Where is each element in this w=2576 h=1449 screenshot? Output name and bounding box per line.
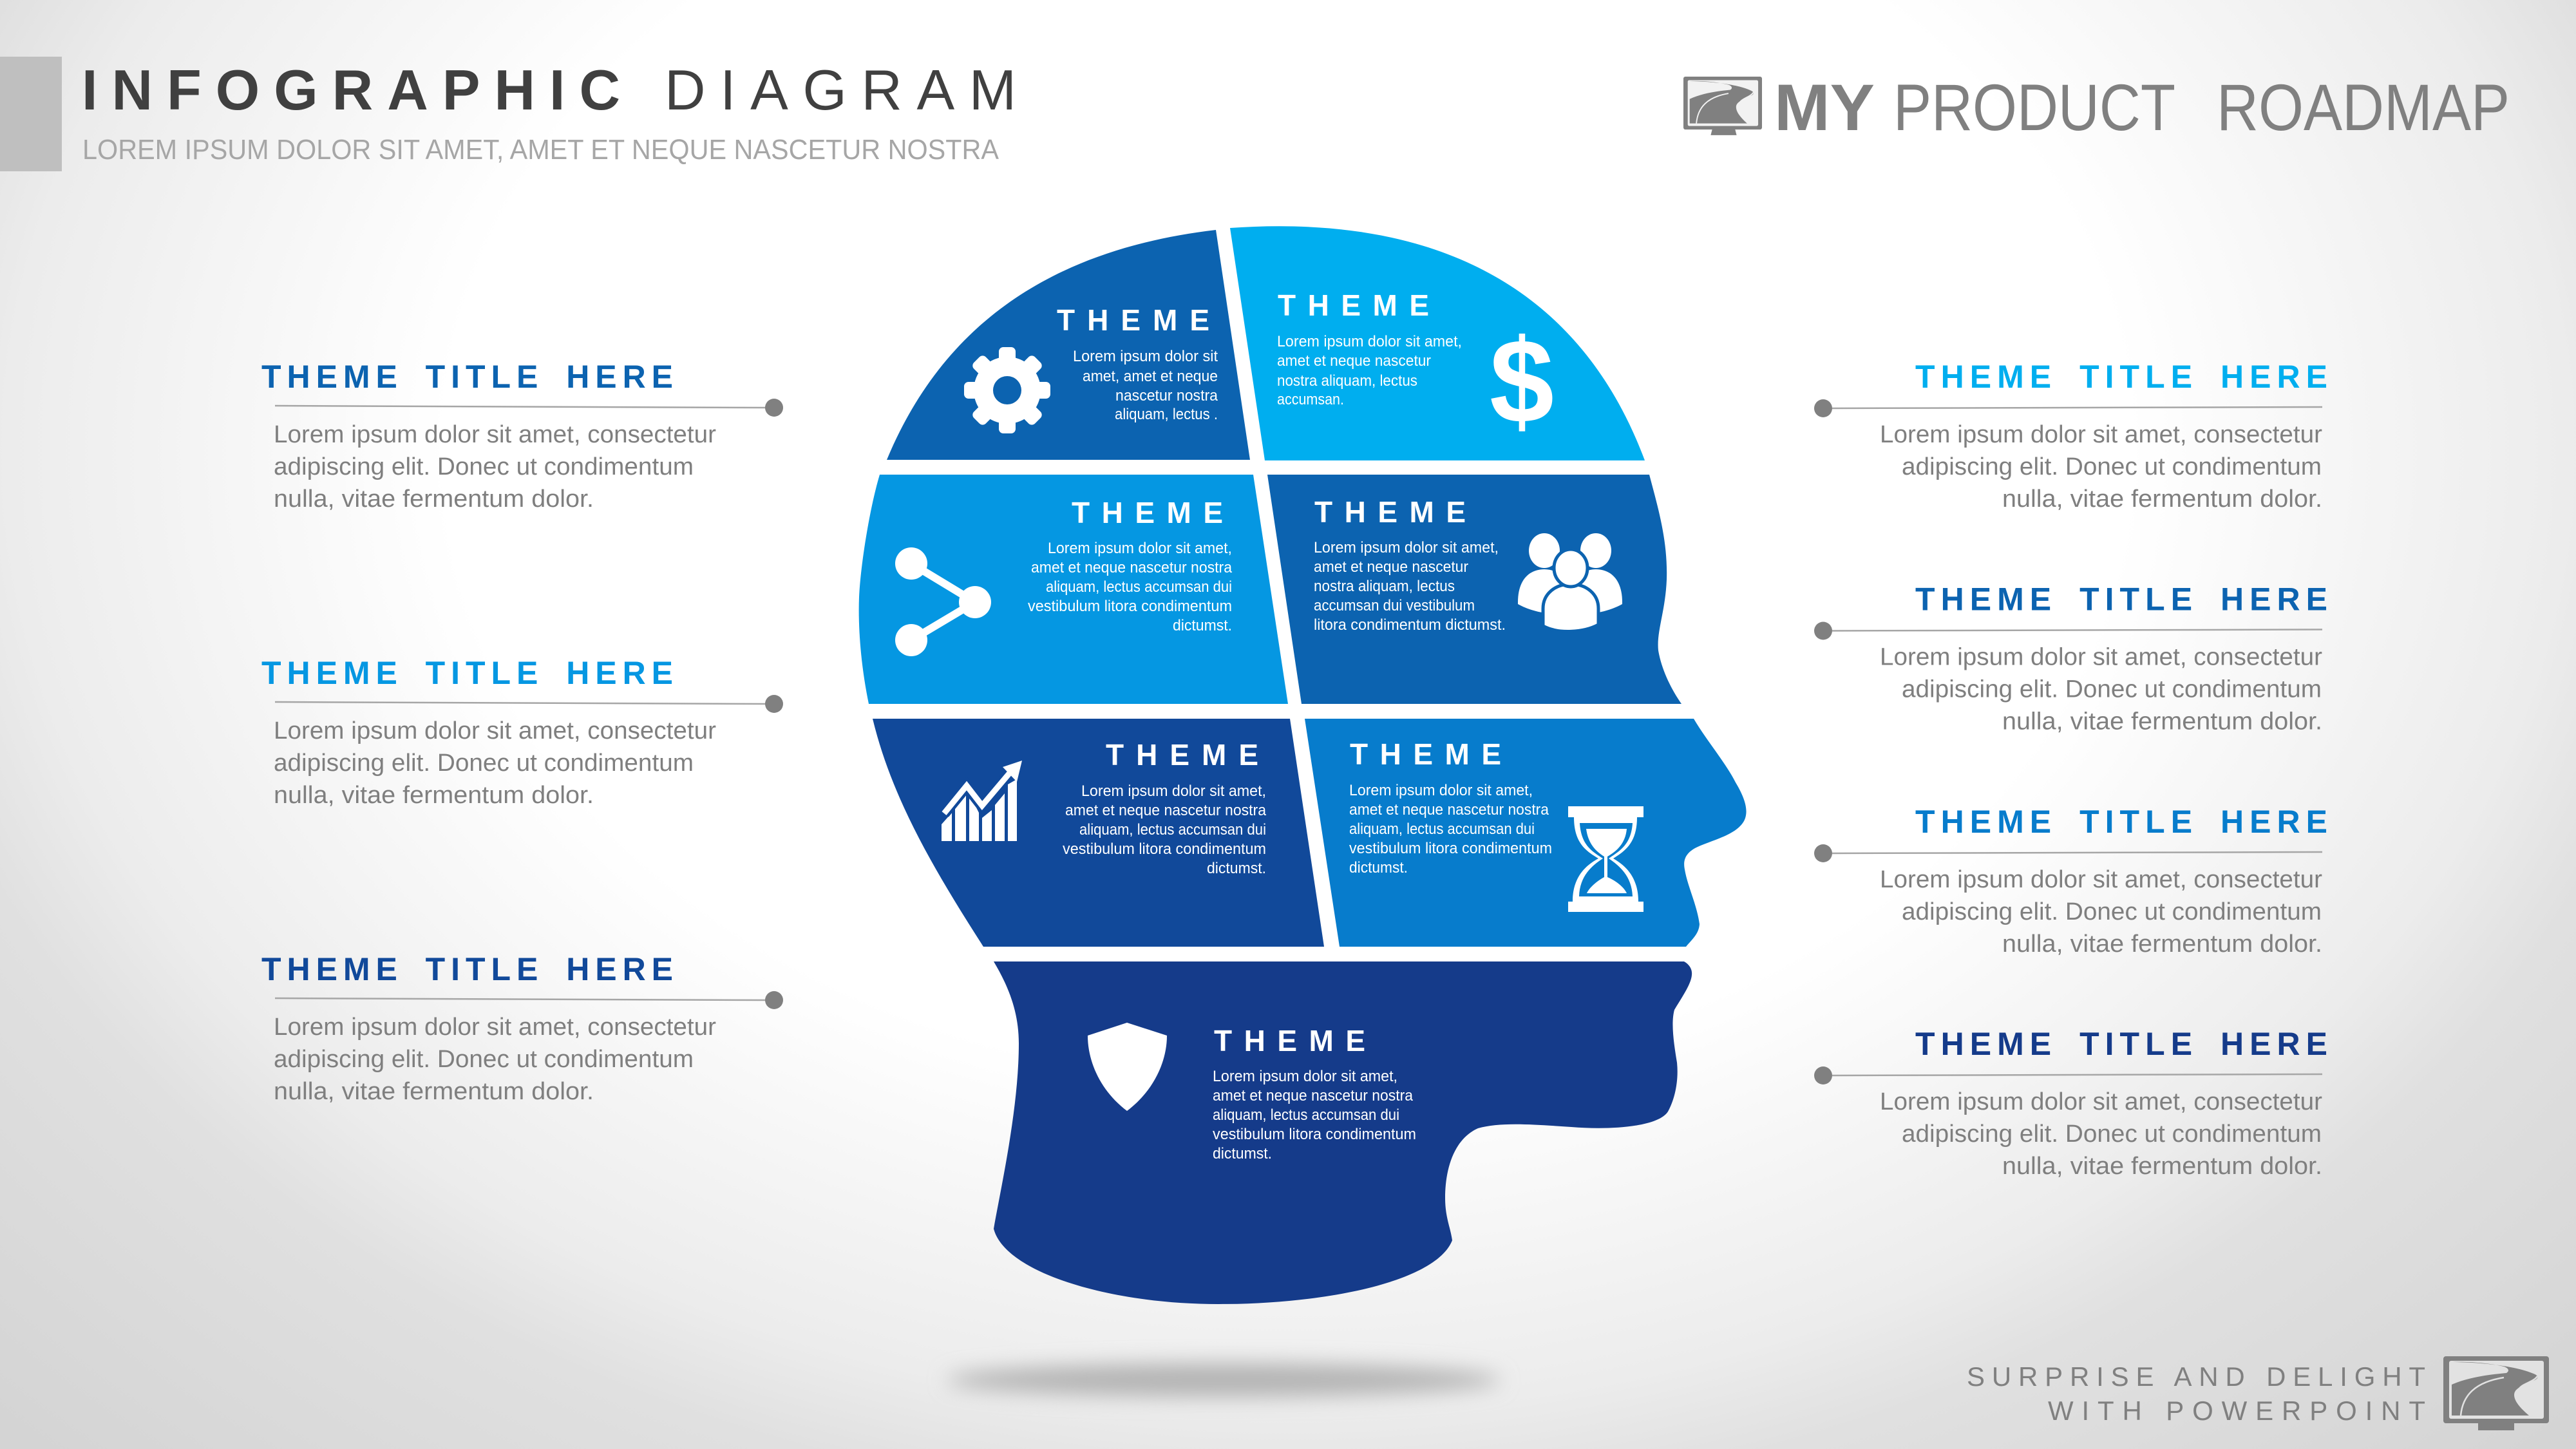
- left callout 1: adipiscing elit. Donec ut condimentum: [274, 453, 694, 480]
- body text: aliquam, lectus .: [1115, 406, 1218, 423]
- right callout 4: Lorem ipsum dolor sit amet, consectetur: [1880, 1088, 2322, 1115]
- body text: amet et neque nascetur nostra: [1349, 801, 1549, 819]
- body text: amet et neque nascetur nostra: [1065, 802, 1267, 819]
- body text: amet et neque nascetur nostra: [1031, 559, 1233, 576]
- right callout 1: adipiscing elit. Donec ut condimentum: [1902, 453, 2322, 480]
- body text: [1277, 333, 1462, 408]
- body text: Lorem ipsum dolor sit amet,: [1213, 1068, 1397, 1085]
- body text: nostra aliquam, lectus: [1314, 578, 1455, 595]
- heading: THEME: [1278, 289, 1429, 322]
- body text: Lorem ipsum dolor sit: [1073, 348, 1218, 365]
- panel: growth chart theme: [873, 719, 1324, 947]
- heading: THEME: [1314, 495, 1466, 529]
- left callout 2: Lorem ipsum dolor sit amet, consectetur: [274, 717, 716, 744]
- right callout 2: [1814, 581, 2327, 735]
- right callout 3: [1814, 804, 2327, 958]
- body text: Lorem ipsum dolor sit amet,: [1277, 333, 1462, 350]
- icon: dollar sign: $: [1490, 315, 1554, 448]
- body text: amet, amet et neque: [1083, 368, 1218, 385]
- panel: share theme: [859, 475, 1288, 704]
- right callout 1: [1814, 359, 2327, 513]
- body text: accumsan.: [1277, 391, 1344, 408]
- body text: [1213, 1068, 1416, 1162]
- icon: hourglass: [1568, 806, 1643, 912]
- left callout 2: THEME TITLE HERE: [261, 655, 673, 691]
- left callout 1: THEME TITLE HERE: [261, 359, 673, 395]
- body text: Lorem ipsum dolor sit amet,: [1314, 539, 1499, 556]
- right callout 4: adipiscing elit. Donec ut condimentum: [1902, 1121, 2322, 1148]
- body text: vestibulum litora condimentum: [1063, 840, 1266, 858]
- footer tagline: SURPRISE AND DELIGHT: [1967, 1361, 2425, 1392]
- body text: [1063, 782, 1267, 877]
- body text: nascetur nostra: [1115, 387, 1218, 404]
- left callout 1: Lorem ipsum dolor sit amet, consectetur: [274, 421, 716, 448]
- right callout 4: THEME TITLE HERE: [1915, 1026, 2327, 1062]
- icon: gear: [964, 347, 1050, 433]
- left callout 3: nulla, vitae fermentum dolor.: [274, 1078, 594, 1105]
- left callout 1: nulla, vitae fermentum dolor.: [274, 486, 594, 513]
- left callout 3: THEME TITLE HERE: [261, 951, 673, 987]
- body text: amet et neque nascetur: [1277, 352, 1431, 370]
- right callout 2: adipiscing elit. Donec ut condimentum: [1902, 676, 2322, 703]
- right callout 4: nulla, vitae fermentum dolor.: [2002, 1153, 2322, 1180]
- body text: vestibulum litora condimentum: [1349, 840, 1552, 857]
- right callout 2: THEME TITLE HERE: [1915, 581, 2327, 617]
- left callout 3: adipiscing elit. Donec ut condimentum: [274, 1046, 694, 1073]
- right callout 3: adipiscing elit. Donec ut condimentum: [1902, 898, 2322, 925]
- left callout 2: [261, 655, 783, 809]
- right callout 1: nulla, vitae fermentum dolor.: [2002, 486, 2322, 513]
- title accent bar: [0, 57, 62, 171]
- icon: share nodes: [895, 547, 991, 656]
- right callout 3: Lorem ipsum dolor sit amet, consectetur: [1880, 866, 2322, 893]
- body text: aliquam, lectus accumsan dui: [1349, 820, 1535, 838]
- right callout 3: THEME TITLE HERE: [1915, 804, 2327, 840]
- logo wordmark: ROADMAP: [2217, 71, 2510, 144]
- body text: aliquam, lectus accumsan dui: [1079, 821, 1266, 838]
- icon: roadmap sign logo: [1683, 77, 1762, 135]
- right callout 1: Lorem ipsum dolor sit amet, consectetur: [1880, 421, 2322, 448]
- title: INFOGRAPHIC: [82, 58, 620, 122]
- left callout 1: [261, 359, 783, 513]
- heading: THEME: [1214, 1024, 1365, 1057]
- title: [82, 58, 1016, 122]
- heading: THEME: [1106, 738, 1258, 772]
- body text: amet et neque nascetur: [1314, 558, 1468, 576]
- body text: nostra aliquam, lectus: [1277, 372, 1417, 390]
- panel: people theme: [1267, 475, 1681, 704]
- panel: hourglass theme: [1305, 719, 1747, 947]
- body text: vestibulum litora condimentum: [1028, 598, 1232, 615]
- body text: litora condimentum dictumst.: [1314, 616, 1506, 634]
- body text: aliquam, lectus accumsan dui: [1213, 1106, 1399, 1124]
- left callout 3: Lorem ipsum dolor sit amet, consectetur: [274, 1014, 716, 1041]
- body text: [1349, 782, 1552, 876]
- body text: [1073, 348, 1218, 423]
- icon: shield: [1088, 1023, 1167, 1111]
- body text: vestibulum litora condimentum: [1213, 1126, 1416, 1143]
- heading: THEME: [1072, 496, 1223, 529]
- panel: shield theme: [994, 961, 1692, 1304]
- heading: THEME: [1350, 737, 1501, 771]
- right callout 4: [1814, 1026, 2327, 1180]
- right callout 3: nulla, vitae fermentum dolor.: [2002, 931, 2322, 958]
- left callout 2: adipiscing elit. Donec ut condimentum: [274, 750, 694, 777]
- body text: accumsan dui vestibulum: [1314, 597, 1475, 614]
- icon: people: [1518, 533, 1622, 632]
- body text: [1314, 539, 1506, 634]
- footer tagline: [1967, 1361, 2425, 1426]
- icon: footer roadmap logo: [2443, 1356, 2549, 1430]
- body text: amet et neque nascetur nostra: [1213, 1087, 1414, 1104]
- logo wordmark: MY: [1774, 71, 1875, 144]
- icon: growth chart: [942, 761, 1022, 841]
- left callout 2: nulla, vitae fermentum dolor.: [274, 782, 594, 809]
- right callout 2: Lorem ipsum dolor sit amet, consectetur: [1880, 644, 2322, 671]
- right callout 2: nulla, vitae fermentum dolor.: [2002, 708, 2322, 735]
- left callout 3: [261, 951, 783, 1105]
- body text: Lorem ipsum dolor sit amet,: [1048, 540, 1232, 557]
- right callout 1: THEME TITLE HERE: [1915, 359, 2327, 395]
- body text: dictumst.: [1349, 859, 1408, 876]
- footer tagline: WITH POWERPOINT: [2048, 1396, 2425, 1426]
- panel: dollar theme: [1230, 226, 1645, 460]
- logo wordmark: PRODUCT: [1893, 71, 2175, 144]
- body text: dictumst.: [1173, 617, 1232, 634]
- subtitle: LOREM IPSUM DOLOR SIT AMET, AMET ET NEQUE NASCETUR NOSTRA: [82, 134, 999, 166]
- body text: dictumst.: [1207, 860, 1266, 877]
- body text: [1028, 540, 1233, 634]
- body text: dictumst.: [1213, 1145, 1272, 1162]
- body text: aliquam, lectus accumsan dui: [1046, 578, 1232, 596]
- heading: THEME: [1057, 303, 1209, 337]
- logo wordmark: [1774, 71, 2510, 144]
- head shadow: [947, 1363, 1501, 1397]
- body text: Lorem ipsum dolor sit amet,: [1349, 782, 1533, 799]
- title: DIAGRAM: [665, 58, 1016, 122]
- body text: Lorem ipsum dolor sit amet,: [1081, 782, 1266, 800]
- panel: gear theme: [887, 230, 1250, 460]
